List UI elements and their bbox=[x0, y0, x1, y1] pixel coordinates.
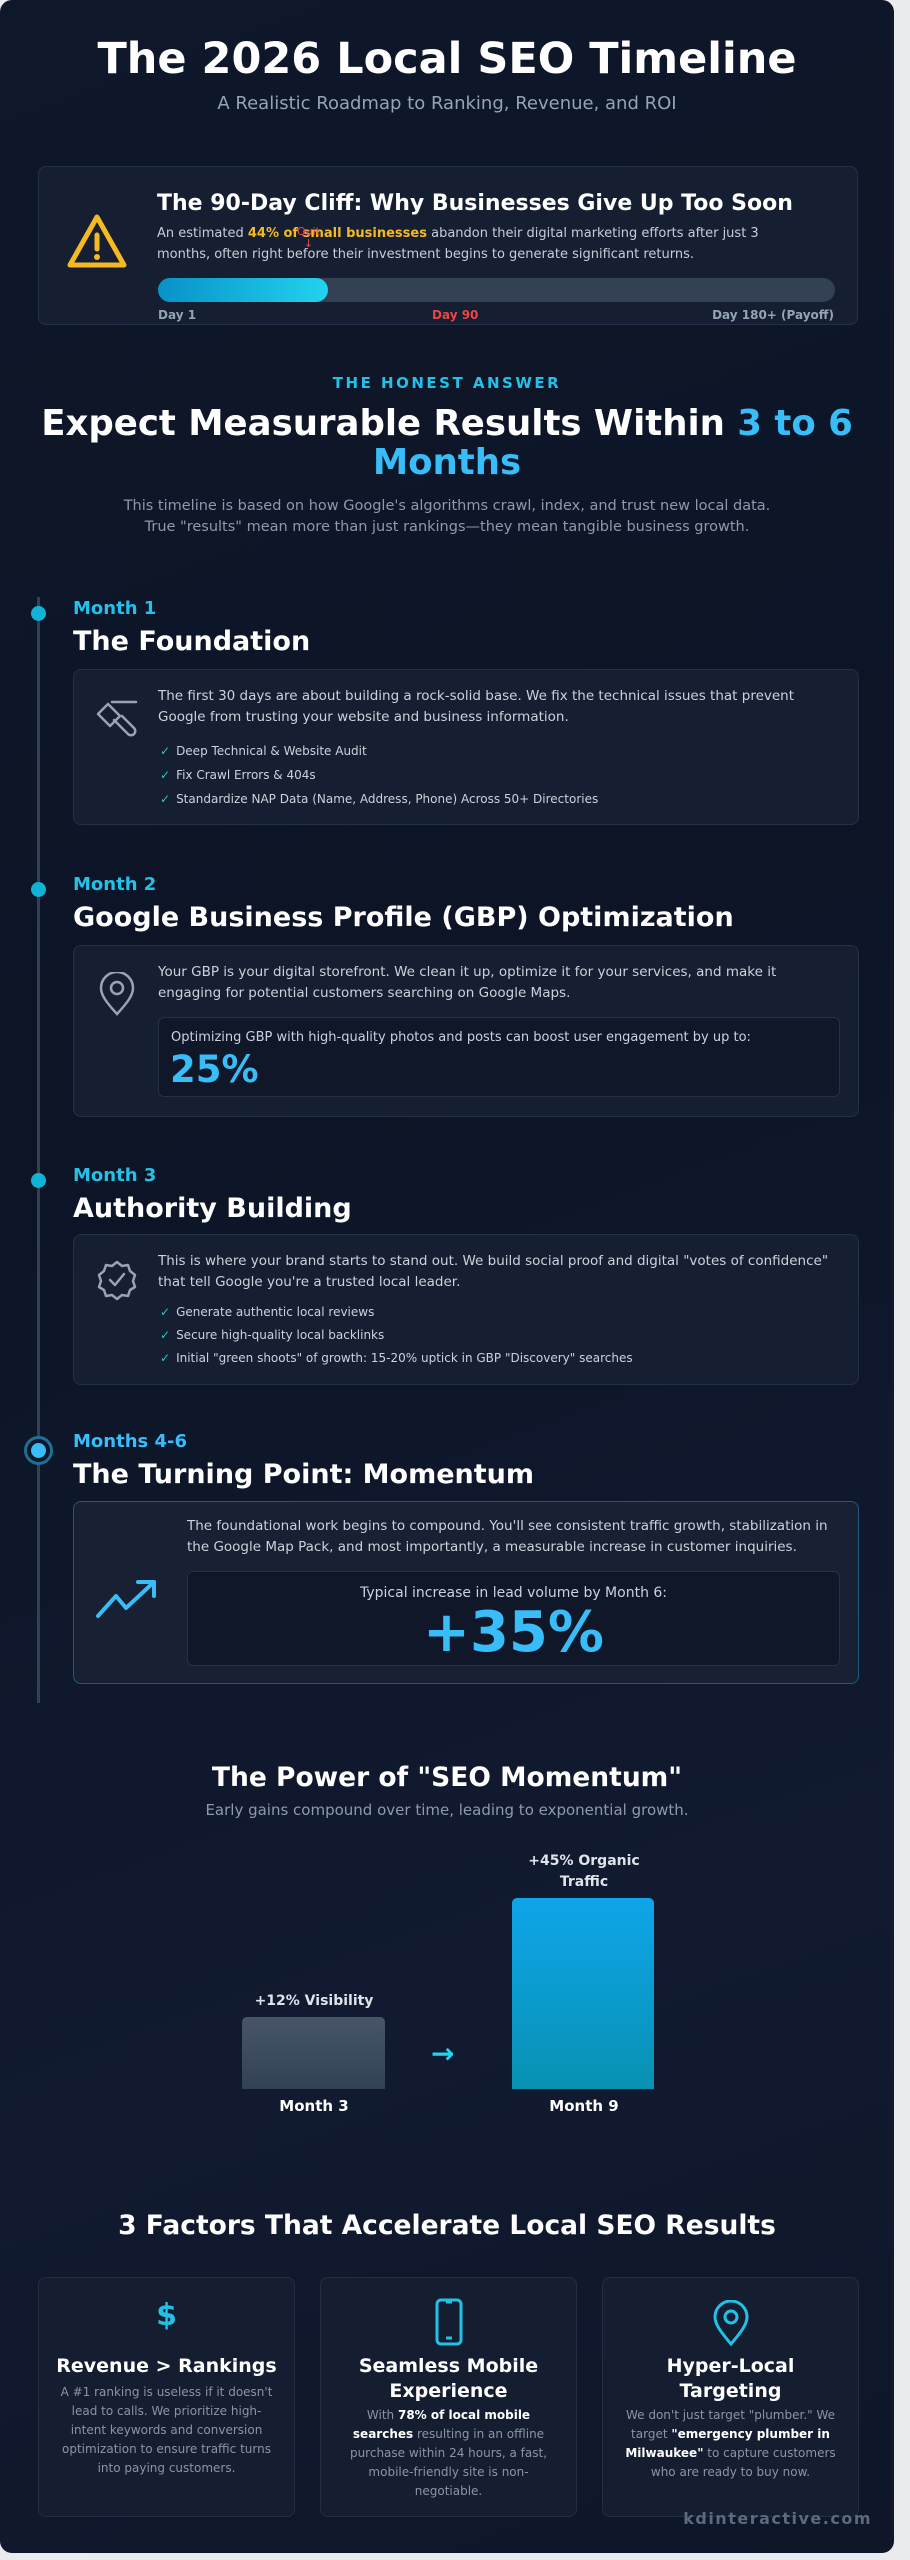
factor card: revenue: Revenue > Rankings bbox=[56, 2355, 277, 2377]
text: An estimated 44% of small businesses abandon their digital marketing efforts after just 3 bbox=[157, 226, 759, 241]
bar: month 9: +45% Organic bbox=[528, 1853, 640, 1869]
factor card: hyper-local bbox=[602, 2277, 859, 2517]
checklist bbox=[160, 744, 598, 806]
text: The first 30 days are about building a rock-solid base. We fix the technical issues that prevent bbox=[158, 688, 794, 704]
icon: trend bbox=[96, 1580, 156, 1618]
checklist: ✓ Fix Crawl Errors & 404s bbox=[160, 768, 316, 782]
timeline line bbox=[37, 597, 40, 1703]
bar labels: Day 1 bbox=[158, 308, 196, 322]
stat box bbox=[158, 1017, 840, 1097]
bar: month 9 bbox=[528, 1853, 640, 1890]
bar chart: Month 3 bbox=[279, 2097, 349, 2115]
factor card: mobile: Experience bbox=[389, 2380, 508, 2402]
panel: 90-day cliff: Day 180+ (Payoff) bbox=[712, 308, 834, 322]
text bbox=[158, 688, 794, 725]
momentum subtitle: Early gains compound over time, leading to exponential growth. bbox=[205, 1801, 689, 1819]
subtitle: A Realistic Roadmap to Ranking, Revenue, and ROI bbox=[217, 93, 677, 114]
label: Month 2 bbox=[73, 874, 156, 895]
description bbox=[124, 498, 770, 535]
arrow: → bbox=[431, 2037, 454, 2070]
checklist: ✓ Deep Technical & Website Audit bbox=[160, 744, 367, 758]
factor card: revenue bbox=[38, 2277, 295, 2517]
dot: highlighted bbox=[24, 1436, 53, 1465]
description: This timeline is based on how Google's algorithms crawl, index, and trust new local data. bbox=[124, 498, 770, 514]
panel bbox=[73, 1234, 859, 1385]
factor card: mobile: With 78% of local mobile searches resulting in an offline purchase within 24 hours, a fast, mobile-friendly site is non-negotiable. bbox=[350, 2408, 547, 2498]
footer brand: kdinteractive.com bbox=[683, 2509, 872, 2528]
bar chart bbox=[242, 1853, 654, 2115]
checklist: ✓ Secure high-quality local backlinks bbox=[160, 1328, 384, 1342]
text: This is where your brand starts to stand out. We build social proof and digital "votes of confidence" bbox=[158, 1253, 828, 1269]
quit marker bbox=[297, 225, 320, 250]
stat box: Optimizing GBP with high-quality photos and posts can boost user engagement by up to: bbox=[171, 1030, 751, 1045]
label: Month 1 bbox=[73, 598, 156, 619]
label: Month 3 bbox=[73, 1165, 156, 1186]
panel: 90-day cliff bbox=[38, 166, 858, 325]
quit marker: ↓ bbox=[304, 237, 313, 250]
label: Months 4-6 bbox=[73, 1431, 187, 1452]
heading: Google Business Profile (GBP) Optimization bbox=[73, 902, 734, 933]
factors heading: 3 Factors That Accelerate Local SEO Results bbox=[118, 2210, 776, 2241]
checklist: ✓ Standardize NAP Data (Name, Address, Phone) Across 50+ Directories bbox=[160, 792, 598, 806]
factor card: hyper-local: Targeting bbox=[680, 2380, 781, 2402]
dot bbox=[31, 882, 46, 897]
checklist: ✓ Generate authentic local reviews bbox=[160, 1305, 374, 1319]
dot bbox=[31, 1173, 46, 1188]
panel: 90-day cliff: Day 90 bbox=[432, 308, 478, 322]
stat: +35%: +35% bbox=[423, 1600, 604, 1665]
icon: map pin bbox=[100, 972, 134, 1016]
main heading: Expect Measurable Results Within 3 to 6 Months bbox=[41, 403, 853, 483]
icon: location pin bbox=[714, 2300, 748, 2346]
factor card: hyper-local: We don't just target "plumber." We target "emergency plumber in Milwaukee" to capture customers who are ready to buy now. bbox=[625, 2408, 836, 2479]
heading: The 90-Day Cliff: Why Businesses Give Up Too Soon bbox=[157, 191, 793, 216]
panel bbox=[73, 945, 859, 1117]
icon: warning bbox=[68, 214, 126, 268]
factor card: mobile: Seamless Mobile bbox=[359, 2355, 538, 2377]
text: months, often right before their investment begins to generate significant returns. bbox=[157, 247, 694, 262]
icon: badge check bbox=[98, 1260, 136, 1300]
icon: dollar: $ bbox=[156, 2298, 177, 2333]
text: engaging for potential customers searching on Google Maps. bbox=[158, 985, 570, 1001]
step: months 4-6 bbox=[24, 1431, 859, 1684]
checklist: ✓ Initial "green shoots" of growth: 15-20% uptick in GBP "Discovery" searches bbox=[160, 1351, 633, 1365]
stat: 25%: 25% bbox=[170, 1048, 259, 1091]
text: the Google Map Pack, and most importantly, a measurable increase in customer inquiries. bbox=[187, 1539, 797, 1555]
panel bbox=[73, 669, 859, 825]
stat box: Typical increase in lead volume by Month 6: bbox=[360, 1585, 667, 1601]
text: Google from trusting your website and business information. bbox=[158, 709, 569, 725]
text: Your GBP is your digital storefront. We clean it up, optimize it for your services, and make it bbox=[158, 964, 776, 980]
bar: month 3: +12% Visibility bbox=[255, 1993, 373, 2009]
factor card: hyper-local: Hyper-Local bbox=[667, 2355, 794, 2377]
text bbox=[158, 964, 776, 1001]
text: that tell Google you're a trusted local leader. bbox=[158, 1274, 460, 1290]
step: month 2 bbox=[31, 874, 859, 1117]
progress bar bbox=[158, 278, 835, 302]
eyebrow: THE HONEST ANSWER bbox=[333, 374, 561, 392]
quit marker: Quit bbox=[297, 225, 320, 238]
panel bbox=[73, 1501, 859, 1684]
checklist bbox=[160, 1305, 633, 1365]
icon: wrench bbox=[96, 700, 138, 736]
factor card: revenue: A #1 ranking is useless if it doesn't lead to calls. We prioritize high-intent keywords and conversion optimization to ensure traffic turns into paying customers. bbox=[61, 2385, 272, 2475]
stat box bbox=[187, 1571, 840, 1666]
bar chart: Month 9 bbox=[549, 2097, 619, 2115]
text bbox=[186, 1518, 828, 1555]
step: month 3 bbox=[31, 1165, 859, 1385]
bar: month 9: Traffic bbox=[560, 1874, 608, 1890]
step: month 1 bbox=[31, 598, 859, 825]
momentum heading: The Power of "SEO Momentum" bbox=[212, 1762, 682, 1793]
title: The 2026 Local SEO Timeline bbox=[97, 34, 797, 84]
dot bbox=[31, 606, 46, 621]
icon: phone bbox=[436, 2298, 462, 2346]
text bbox=[158, 1253, 828, 1290]
factor card: mobile bbox=[320, 2277, 577, 2517]
text bbox=[157, 226, 759, 262]
description: True "results" mean more than just rankings—they mean tangible business growth. bbox=[145, 519, 749, 535]
heading: Authority Building bbox=[73, 1193, 352, 1224]
heading: The Turning Point: Momentum bbox=[73, 1459, 534, 1490]
text: The foundational work begins to compound. You'll see consistent traffic growth, stabilization in bbox=[187, 1518, 828, 1534]
heading: The Foundation bbox=[73, 626, 310, 657]
